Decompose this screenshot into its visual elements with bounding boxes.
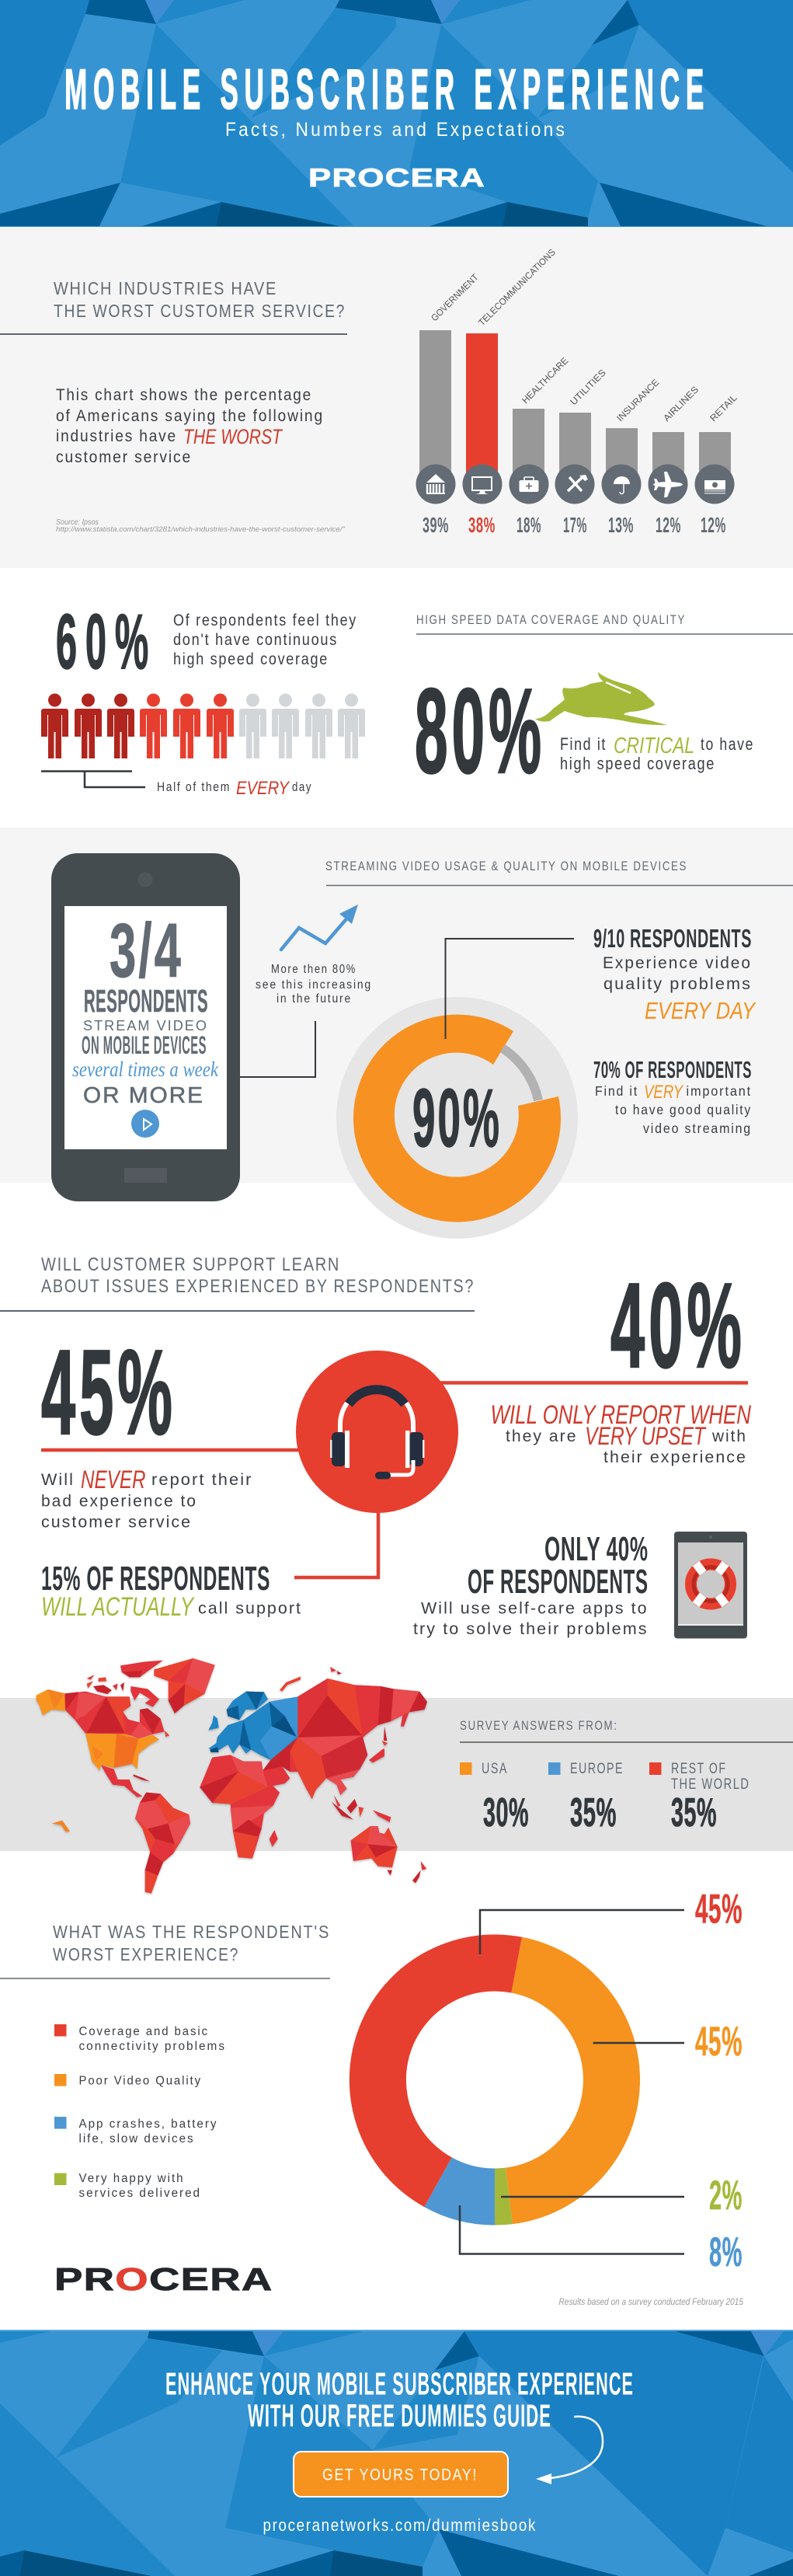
panel: footer call to action <box>0 2330 793 2576</box>
logo: Procera white: PROCERA <box>308 163 485 192</box>
text: will only report: VERY UPSET <box>585 1422 707 1450</box>
value labels: 39% <box>423 513 449 537</box>
stat: 70 percent of respondents: to have good quality <box>615 1102 752 1117</box>
heading: customer support: WILL CUSTOMER SUPPORT LEARN <box>41 1254 340 1275</box>
value labels: 38% <box>468 513 496 537</box>
bar chart: UTILITIES <box>568 368 608 407</box>
survey date note: Results based on a survey conducted February 2015 <box>559 2298 744 2307</box>
heading: customer support: ABOUT ISSUES EXPERIENCED BY RESPONDENTS? <box>41 1276 475 1297</box>
website link: proceranetworks.com/dummiesbook <box>263 2515 537 2535</box>
bar chart <box>416 246 739 537</box>
chart: 90 percent donut: 90% <box>412 1072 502 1164</box>
stat text: critical: Find it <box>560 734 607 754</box>
donut values: 45% <box>695 2019 743 2065</box>
icon: headset in red circle <box>296 1351 458 1513</box>
text: will never report: report their <box>151 1471 253 1489</box>
bar chart: GOVERNMENT <box>429 271 481 323</box>
value labels: 12% <box>701 513 726 537</box>
connector: donut to stat <box>446 939 574 1039</box>
legend: survey answers: THE WORLD <box>671 1776 750 1793</box>
icon: government <box>416 465 455 504</box>
legend: experience categories: services delivered <box>79 2187 201 2200</box>
icon: briefcase <box>510 465 548 504</box>
stat: 70 percent of respondents: important <box>687 1083 752 1099</box>
icon: tablet with lifebuoy <box>674 1532 747 1638</box>
icon: tools <box>555 465 595 504</box>
value labels: 17% <box>563 513 587 537</box>
panel: worst experience <box>0 1887 744 2307</box>
connector: phone to caption <box>240 1021 315 1077</box>
stat: 9/10 respondents: EVERY DAY <box>645 997 756 1024</box>
legend: experience categories: life, slow devices <box>79 2132 194 2146</box>
connector lines <box>41 1383 748 1577</box>
bar chart: RETAIL <box>708 392 739 424</box>
text: will only report: they are <box>506 1427 578 1445</box>
heading: customer support <box>0 1254 475 1311</box>
text: will never report <box>41 1466 253 1531</box>
heading: high speed data: HIGH SPEED DATA COVERAGE AND QUALITY <box>416 613 686 627</box>
connectors: donut callouts <box>460 1910 684 2254</box>
stat: 15 percent call support: 15% OF RESPONDENTS <box>41 1560 270 1598</box>
description text: of Americans saying the following <box>56 407 324 425</box>
stat text: critical: CRITICAL <box>614 734 694 758</box>
text: will never report: customer service <box>41 1514 192 1531</box>
icon: airplane <box>648 465 688 504</box>
stat: 9/10 respondents: quality problems <box>603 975 752 993</box>
legend: survey answers: EUROPE <box>570 1761 624 1777</box>
donut values: 8% <box>709 2229 743 2275</box>
description text <box>56 386 324 466</box>
source note <box>56 518 346 534</box>
text: will never report: bad experience to <box>41 1492 197 1511</box>
description text: industries have <box>56 427 177 445</box>
caption: half of them every day: EVERY <box>236 778 290 799</box>
legend: survey answers: 35% <box>570 1790 617 1835</box>
donut values: 45% <box>695 1887 743 1932</box>
legend: survey answers: 35% <box>671 1790 717 1835</box>
panel: high speed coverage: 80% <box>415 664 545 798</box>
panel: high speed coverage: 60% <box>56 598 157 685</box>
stat: 15 percent call support: WILL ACTUALLY <box>41 1592 195 1622</box>
description text: THE WORST <box>183 425 283 448</box>
icon: phone with 3/4 stat: OR MORE <box>83 1083 204 1108</box>
value labels: 18% <box>516 513 541 537</box>
icon: phone with 3/4 stat: 3/4 <box>110 908 183 993</box>
icon: money <box>694 465 735 504</box>
trend caption: in the future <box>277 992 352 1006</box>
panel: header banner <box>0 0 793 227</box>
legend: survey answers: SURVEY ANSWERS FROM: <box>460 1718 618 1733</box>
map: polygonal world map <box>37 1658 427 1894</box>
stat: only 40 percent self-care: Will use self-care apps to <box>421 1599 649 1618</box>
logo: Procera dark: PR O CERA <box>54 2261 273 2297</box>
stat: 70 percent of respondents: VERY <box>644 1082 684 1103</box>
bar chart: AIRLINES <box>661 384 701 424</box>
heading: streaming: STREAMING VIDEO USAGE & QUALITY ON MOBILE DEVICES <box>325 859 687 873</box>
text: will only report <box>491 1400 751 1466</box>
text: will never report: NEVER <box>81 1466 146 1494</box>
icon: phone with 3/4 stat: STREAM VIDEO <box>83 1018 208 1034</box>
stat: 70 percent of respondents <box>593 1056 752 1136</box>
stat: 9/10 respondents: Experience video <box>603 954 752 972</box>
legend: survey answers: REST OF <box>671 1761 727 1777</box>
source note: http://www.statista.com/chart/3281/which-industries-have-the-worst-customer-service/" <box>56 525 346 534</box>
trend caption <box>256 963 372 1006</box>
caption: half of them every day: day <box>292 779 312 794</box>
bracket connector <box>41 771 145 787</box>
text: will never report: Will <box>41 1471 75 1489</box>
icon: monitor <box>463 465 502 504</box>
bar chart: INSURANCE <box>614 377 661 424</box>
bar chart: HEALTHCARE <box>520 355 570 406</box>
legend: experience categories: connectivity problems <box>79 2040 226 2053</box>
icon: umbrella <box>601 465 642 504</box>
panel: high speed coverage <box>0 568 793 828</box>
stat text: Of respondents feel they <box>173 612 357 629</box>
stat: only 40 percent self-care: OF RESPONDENTS <box>468 1563 649 1601</box>
value labels: 13% <box>608 513 634 537</box>
legend: experience categories: Poor Video Quality <box>79 2075 202 2087</box>
bar chart: TELECOMMUNICATIONS <box>476 246 558 328</box>
legend: experience categories <box>54 2024 226 2200</box>
legend: survey answers <box>460 1718 793 1835</box>
panel: survey band <box>0 1698 793 1851</box>
icon: phone with 3/4 stat <box>51 853 240 1201</box>
heading <box>0 278 347 334</box>
arrow: upward trend <box>281 905 358 950</box>
stat text: critical: high speed coverage <box>560 754 715 773</box>
source note: Source: Ipsos <box>56 518 99 527</box>
stat text <box>173 612 357 668</box>
chart: 90 percent donut <box>336 997 578 1239</box>
stat text: high speed coverage <box>173 650 329 668</box>
caption: half of them every day: Half of them <box>157 779 231 794</box>
heading: worst experience: WORST EXPERIENCE? <box>53 1944 239 1964</box>
stat: 70 percent of respondents: Find it <box>595 1083 638 1099</box>
button: get yours today: GET YOURS TODAY! <box>322 2466 478 2484</box>
legend: survey answers: 30% <box>483 1790 529 1835</box>
stat text: critical <box>560 734 754 773</box>
description text: This chart shows the percentage <box>56 386 312 404</box>
panel: customer support <box>0 1254 751 1638</box>
stat text: critical: to have <box>701 734 754 754</box>
heading: worst experience <box>0 1922 330 1978</box>
legend: experience categories: Coverage and basic <box>79 2025 209 2038</box>
icon: phone with 3/4 stat: RESPONDENTS <box>84 983 208 1019</box>
button: get yours today <box>294 2452 508 2497</box>
arrow: curved to button <box>536 2417 603 2484</box>
stat: only 40 percent self-care: try to solve their problems <box>413 1620 649 1638</box>
legend: survey answers: USA <box>482 1761 508 1777</box>
heading: THE WORST CUSTOMER SERVICE? <box>54 301 346 321</box>
stat: 9/10 respondents <box>593 924 756 1024</box>
chart: worst experience donut <box>350 1934 640 2226</box>
stat: only 40 percent self-care <box>413 1530 649 1638</box>
icon: running rabbit <box>535 672 667 725</box>
subtitle: Facts, Numbers and Expectations <box>225 119 567 141</box>
value labels <box>423 513 726 537</box>
call to action headline <box>165 2365 634 2434</box>
stat: 70 percent of respondents: video streaming <box>643 1121 752 1136</box>
caption: half of them every day <box>157 778 312 799</box>
stat text: don't have continuous <box>173 631 338 649</box>
legend: experience categories: Very happy with <box>79 2172 185 2185</box>
trend caption: More then 80% <box>271 963 357 976</box>
icon: phone with 3/4 stat: ON MOBILE DEVICES <box>82 1031 207 1059</box>
panel: streaming video <box>0 828 793 1201</box>
donut values <box>695 1887 743 2275</box>
panel: worst customer service industries <box>0 227 793 568</box>
legend: experience categories: App crashes, battery <box>79 2118 217 2131</box>
stat: only 40 percent self-care: ONLY 40% <box>544 1530 649 1568</box>
value labels: 12% <box>656 513 681 537</box>
stat: 15 percent call support <box>41 1560 302 1622</box>
stat: 45 percent: 45% <box>41 1325 176 1459</box>
heading: worst experience: WHAT WAS THE RESPONDENT'S <box>53 1922 330 1942</box>
text: will only report: with <box>711 1427 747 1445</box>
trend caption: see this increasing <box>256 978 372 992</box>
pictogram: ten people <box>41 693 365 758</box>
donut values: 2% <box>709 2173 743 2219</box>
description text: customer service <box>56 448 192 466</box>
heading: WHICH INDUSTRIES HAVE <box>54 278 277 298</box>
icon: phone with 3/4 stat: several times a week <box>72 1058 219 1081</box>
text: will only report: their experience <box>603 1448 747 1466</box>
stat: 15 percent call support: call support <box>198 1599 302 1618</box>
